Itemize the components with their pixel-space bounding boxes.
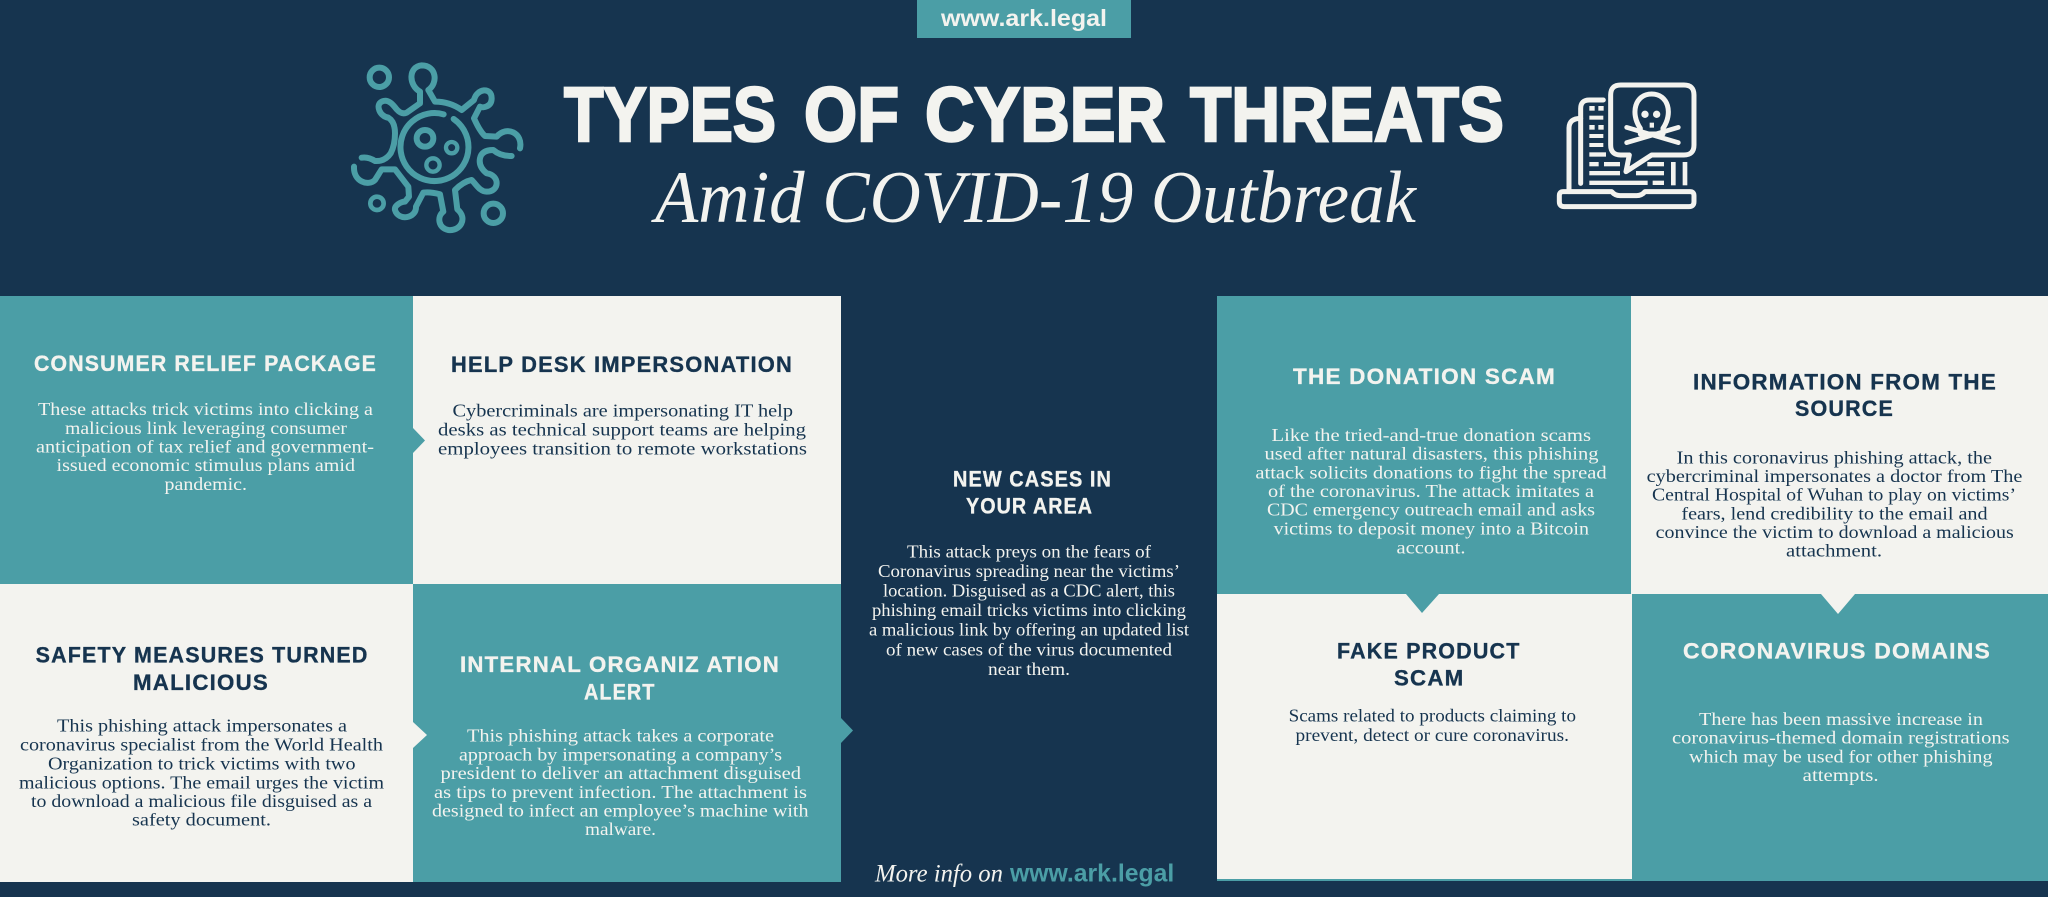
panel: internal organization alert: designed to infect an employee’s machine with [432, 801, 808, 821]
subtitle: Amid COVID-19 Outbreak [650, 157, 1417, 239]
panel: safety measures turned malicious: coronavirus specialist from the World Health [20, 734, 383, 754]
panel: internal organization alert: as tips to prevent infection. The attachment is [434, 782, 807, 802]
footer: more info link [874, 860, 1174, 888]
panel: consumer relief package [0, 296, 413, 584]
panel: consumer relief package: pandemic. [164, 474, 247, 494]
panel: the donation scam [1217, 296, 1631, 613]
panel: coronavirus domains: attempts. [1803, 765, 1879, 785]
panel: information from the source: Central Hospital of Wuhan to play on victims’ [1652, 485, 2016, 505]
panel: new cases in your area: of new cases of the virus documented [886, 639, 1172, 659]
title [564, 72, 1504, 158]
panel: internal organization alert: This phishing attack takes a corporate [467, 726, 774, 746]
panel: new cases in your area: phishing email tricks victims into clicking [872, 600, 1186, 620]
panel: help desk impersonation: HELP DESK IMPERSONATION [451, 352, 793, 377]
panel: new cases in your area: near them. [988, 659, 1070, 679]
panel: safety measures turned malicious: This phishing attack impersonates a [57, 716, 347, 736]
panel: safety measures turned malicious: SAFETY MEASURES TURNED [36, 643, 369, 668]
panel: information from the source: cybercriminal impersonates a doctor from The [1647, 466, 2022, 486]
panel: information from the source: fears, lend credibility to the email and [1681, 503, 1988, 523]
panel: new cases in your area: YOUR AREA [966, 493, 1093, 518]
panel: consumer relief package: malicious link leveraging consumer [65, 418, 347, 438]
panel: coronavirus domains: There has been massive increase in [1699, 709, 1983, 729]
panel: internal organization alert [413, 584, 853, 882]
panel: internal organization alert: president to deliver an attachment disguised [440, 763, 801, 783]
panel: safety measures turned malicious: safety document. [132, 810, 271, 830]
title: CYBER [925, 72, 1165, 158]
panel: safety measures turned malicious [0, 584, 413, 882]
panel: fake product scam: SCAM [1394, 666, 1464, 691]
panel: safety measures turned malicious: malicious options. The email urges the victim [19, 772, 384, 792]
footer: more info link: www.ark.legal [1009, 860, 1174, 888]
panel: consumer relief package: CONSUMER RELIEF PACKAGE [34, 351, 377, 376]
panel: coronavirus domains: which may be used for other phishing [1689, 746, 1992, 766]
website tab: www.ark.legal [940, 5, 1107, 31]
panel: the donation scam: THE DONATION SCAM [1293, 364, 1556, 389]
panel: internal organization alert: INTERNAL ORGANIZ ATION [460, 652, 780, 677]
title: THREATS [1190, 72, 1504, 158]
panel: new cases in your area: This attack preys on the fears of [907, 541, 1151, 561]
panel: the donation scam: attack solicits donations to fight the spread [1255, 462, 1607, 482]
panel: help desk impersonation: employees transition to remote workstations [438, 438, 807, 458]
panel: new cases in your area [869, 467, 1189, 679]
panel: fake product scam: prevent, detect or cure coronavirus. [1296, 725, 1569, 745]
panel: consumer relief package: issued economic stimulus plans amid [56, 455, 355, 475]
icon: laptop with skull speech bubble [1559, 85, 1694, 207]
panel: information from the source: SOURCE [1795, 396, 1894, 421]
panel: the donation scam: used after natural disasters, this phishing [1264, 444, 1598, 464]
panel: fake product scam: FAKE PRODUCT [1337, 638, 1520, 663]
panel: the donation scam: Like the tried-and-true donation scams [1272, 425, 1591, 445]
panel: safety measures turned malicious: to download a malicious file disguised as a [31, 791, 372, 811]
panel: consumer relief package: anticipation of tax relief and government- [36, 437, 374, 457]
panel: coronavirus domains [1632, 594, 2048, 881]
panel: coronavirus domains: coronavirus-themed domain registrations [1672, 728, 2010, 748]
panel: coronavirus domains: CORONAVIRUS DOMAINS [1683, 638, 1991, 663]
panel: internal organization alert: approach by impersonating a company’s [459, 744, 782, 764]
panel: help desk impersonation: Cybercriminals are impersonating IT help [452, 401, 793, 421]
panel: the donation scam: CDC emergency outreach email and asks [1267, 500, 1595, 520]
panel: information from the source [1631, 296, 2048, 614]
panel: the donation scam: account. [1396, 537, 1466, 557]
title: TYPES [564, 72, 776, 158]
panel: the donation scam: victims to deposit money into a Bitcoin [1274, 518, 1589, 538]
panel: fake product scam [1217, 594, 1632, 881]
website tab [917, 0, 1131, 38]
icon: virus [354, 65, 520, 230]
panel: new cases in your area: location. Disguised as a CDC alert, this [883, 580, 1175, 600]
footer: more info link: More info on [874, 861, 1003, 888]
panel: safety measures turned malicious: MALICIOUS [133, 670, 269, 695]
panel: fake product scam: Scams related to products claiming to [1289, 706, 1576, 726]
panel: new cases in your area: a malicious link by offering an updated list [869, 620, 1189, 640]
panel: information from the source: In this coronavirus phishing attack, the [1677, 447, 1992, 467]
panel: new cases in your area: Coronavirus spreading near the victims’ [878, 561, 1180, 581]
panel: help desk impersonation [413, 296, 841, 584]
panel: safety measures turned malicious: Organization to trick victims with two [48, 753, 356, 773]
panel: internal organization alert: malware. [585, 819, 656, 839]
panel: help desk impersonation: desks as technical support teams are helping [438, 420, 806, 440]
panel: consumer relief package: These attacks trick victims into clicking a [38, 399, 373, 419]
panel: information from the source: convince the victim to download a malicious [1656, 522, 2014, 542]
title: OF [804, 72, 899, 158]
panel: information from the source: INFORMATION FROM THE [1693, 369, 1997, 394]
panel: internal organization alert: ALERT [584, 679, 656, 704]
panel: information from the source: attachment. [1786, 541, 1882, 561]
panel: the donation scam: of the coronavirus. The attack imitates a [1268, 481, 1594, 501]
panel: new cases in your area: NEW CASES IN [953, 467, 1112, 492]
